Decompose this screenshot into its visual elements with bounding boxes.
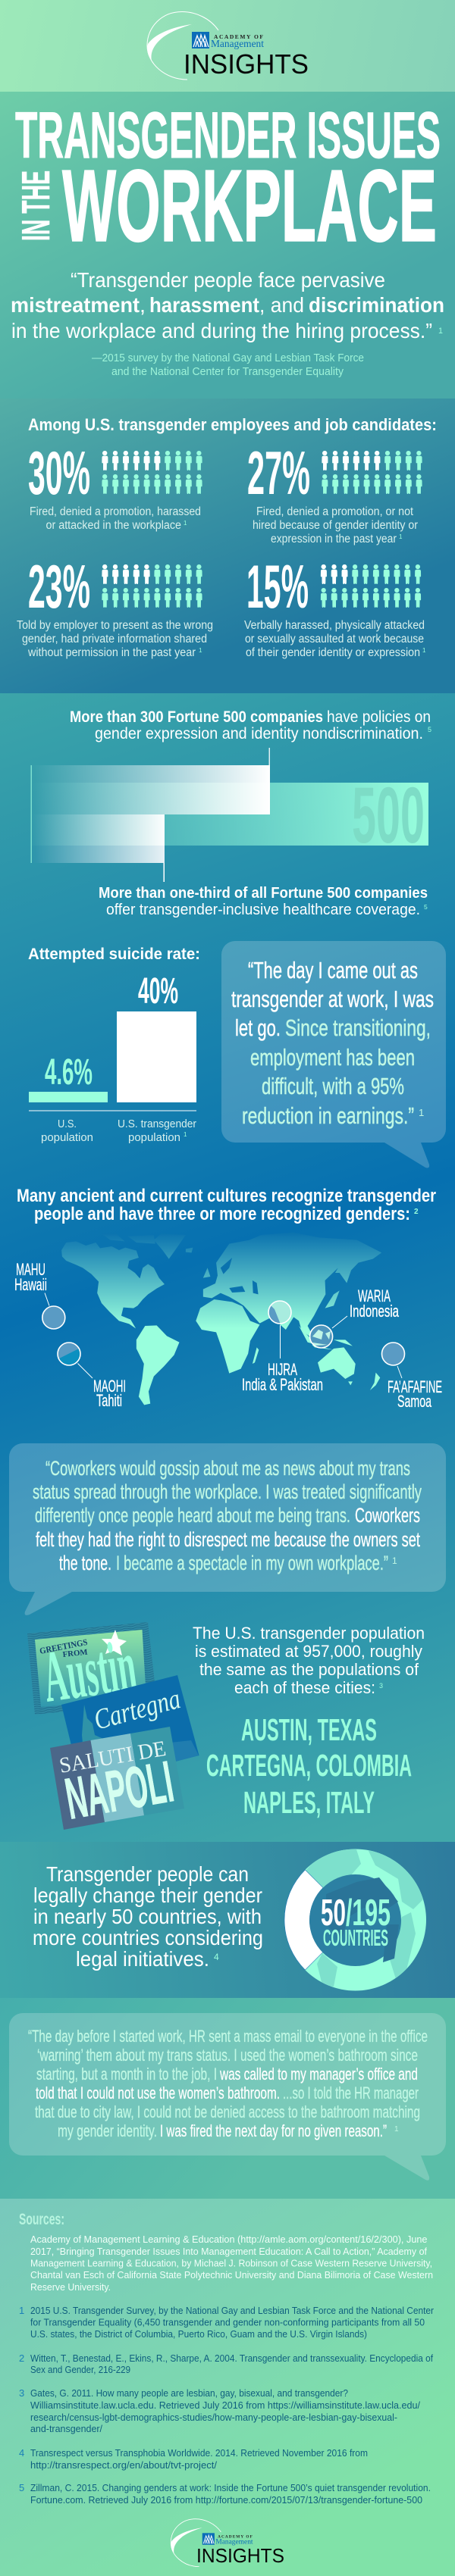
text: legal gender change: legally change their gender [33,1884,262,1907]
map marker: Fa'afafine, Samoa: Samoa [397,1392,431,1411]
source 3: Gates, G. 2011. How many people are lesbian, gay, bisexual, and transgender? [30,2387,348,2399]
source 2 [19,2352,433,2375]
callout: speech bubble quote 3: my gender identity. [58,2121,157,2140]
source 4: http://transrespect.org/en/about/tvt-project/ [30,2459,217,2471]
text: fortune 500 policies: 5 [428,726,431,733]
caption: Fired, denied a promotion, harassed [30,505,201,518]
donut chart: 50 of 195 countries: 50 [321,1893,346,1934]
title [14,99,441,263]
panel: sources [0,2199,455,2576]
bar: U.S. population [29,1052,108,1102]
caption: of their gender identity or expression [246,646,420,659]
postcard: Napoli: NAPOLI [61,1749,178,1832]
source 1: for Transgender Equality (6,450 transgender and gender non-conforming participants from all 50 [30,2317,425,2327]
source 1: 1 [19,2305,24,2316]
axis labels: U.S. transgender [118,1118,196,1130]
text: fortune 500 policies: have policies on [327,708,431,726]
source 3: 3 [19,2387,24,2399]
postcard: Austin [27,1622,157,1718]
source 3: Williamsinstitute.law.ucla.edu. Retrieved July 2016 from https://williamsinstitute.law.ucla.edu/ [30,2399,420,2411]
text: population comparison: the same as the populations of [199,1660,419,1679]
source 4: Transrespect versus Transphobia Worldwide. 2014. Retrieved November 2016 from [30,2447,368,2459]
callout: speech bubble quote 1: let go. [235,1014,281,1041]
bar: 300 companies [31,765,270,814]
callout: speech bubble quote 1 [221,941,446,1168]
intro quote: harassment [149,293,259,317]
heading: cultures [17,1186,436,1224]
postcard: Cartegna: Cartegna [90,1683,184,1737]
callout: speech bubble quote 3: told that I could not use the women’s bathroom. [36,2084,280,2102]
donut chart: 50 of 195 countries: /195 [346,1893,391,1934]
source 5: 5 [19,2482,24,2493]
callout: speech bubble quote 3 [9,2013,446,2181]
title: IN THE [14,170,58,241]
text: population comparison: The U.S. transgender population [193,1624,425,1643]
callout: speech bubble quote 2 [9,1443,446,1615]
callout: speech bubble quote 2: Coworkers [355,1504,420,1527]
intro quote: discrimination [309,293,444,317]
chart: attempted suicide rate: Attempted suicide rate: [28,946,200,963]
map marker: Fa'afafine, Samoa [382,1343,442,1411]
source 1 [19,2305,435,2340]
bar: one-third of companies [31,814,165,863]
stat: 15 percent [244,553,426,659]
axis labels: U.S. [58,1118,77,1130]
pictogram: 6 of 20 people [322,451,422,494]
axis labels: population [128,1131,180,1144]
logo: footer [171,2519,284,2567]
postcard: Cartegna [61,1675,199,1786]
stat: 23 percent [17,553,213,659]
panel: legal gender change [0,1842,455,1998]
map marker: Maohi, Tahiti: MAOHI [93,1377,126,1396]
source 3 [19,2387,420,2434]
postcard: Napoli [50,1727,184,1832]
callout: speech bubble quote 2: 1 [392,1555,397,1566]
source: AMLE article: Reserve University. [30,2281,111,2293]
donut chart: 50 of 195 countries [284,1849,428,1991]
map marker: Waria, Indonesia: WARIA [358,1286,391,1305]
bar: U.S. transgender population: 40% [138,971,178,1011]
axis labels: population [41,1131,93,1144]
map marker: Maohi, Tahiti: Tahiti [96,1391,122,1410]
callout: speech bubble quote 3: starting, but a month in to the job, I [36,2065,217,2084]
caption: Told by employer to present as the wrong [17,619,213,632]
source: AMLE article: 2017, “Bringing Transgender Issues Into Management Education: A Call to Action,” Academy of [30,2246,427,2257]
text: population comparison: is estimated at 957,000, roughly [195,1642,422,1661]
logo: Academy of Management Insights [147,12,309,80]
intro quote: , [140,293,146,317]
caption [253,505,418,546]
text: legal gender change [33,1862,263,1971]
logo: footer: INSIGHTS [196,2546,284,2567]
text: healthcare coverage: 5 [424,903,428,911]
source 2: 2 [19,2352,24,2364]
source 5: Zillman, C. 2015. Changing genders at work: Inside the Fortune 500’s quiet transgender revolution. [30,2482,431,2493]
axis labels: 1 [184,1131,187,1138]
callout: speech bubble quote 3: 1 [394,2125,399,2134]
source 3: research/census-lgbt-demographics-studies/how-many-people-are-lesbian-gay-bisexual- [30,2412,397,2423]
text: healthcare coverage: More than one-third of all Fortune 500 companies [99,885,428,902]
panel: fortune 500, suicide rate, cultures, cities [0,693,455,1842]
pictogram: 3 of 20 people [321,564,421,608]
intro quote: , and [259,293,304,317]
pictogram: 6 of 20 people [102,451,202,494]
panel: title and intro quote [0,92,455,399]
text: fortune 500 policies: More than 300 Fortune 500 companies [70,708,323,726]
intro quote: mistreatment [11,293,140,317]
postcard: Napoli: SALUTI DE [58,1737,168,1778]
intro quote: in the workplace and during the hiring process.” [11,319,432,342]
map marker: Mahu, Hawaii: MAHU [16,1260,46,1279]
logo: footer: ACADEMY OF [218,2535,253,2540]
source 3: and-transgender/ [30,2423,102,2434]
quote attribution: —2015 survey by the National Gay and Lesbian Task Force [92,352,364,364]
text: legal gender change: legal initiatives. [76,1947,209,1971]
caption: 1 [199,647,202,654]
heading: sources: Sources: [19,2211,64,2228]
source 4: 4 [19,2447,24,2459]
stat: 27 percent: 27% [247,439,310,508]
caption: hired because of gender identity or [253,519,418,532]
stat: 15 percent: 15% [246,553,309,621]
text: legal gender change: in nearly 50 countries, with [33,1905,262,1928]
bar: 500 companies [31,783,428,846]
source 2: Sex and Gender, 216-229 [30,2364,130,2375]
callout: speech bubble quote 2: the tone. [59,1552,111,1574]
map marker: Mahu, Hawaii: Hawaii [14,1275,47,1294]
pictogram: 5 of 20 people [102,564,202,608]
source 5 [19,2482,431,2506]
postcards [27,1622,199,1832]
text: healthcare coverage: offer transgender-inclusive healthcare coverage. [106,901,420,918]
bar: U.S. population: 4.6% [45,1052,93,1093]
text: population comparison: each of these cities: [234,1678,375,1697]
chart: fortune 500 bars [30,748,428,882]
logo: Academy of Management Insights: ACADEMY OF [214,33,263,40]
intro quote: “Transgender people face pervasive [71,268,385,292]
stat: 27 percent [247,439,422,546]
map marker: Hijra, India and Pakistan: HIJRA [268,1360,297,1379]
caption: 1 [184,520,187,527]
source 5: Fortune.com. Retrieved July 2016 from http://fortune.com/2015/07/13/transgender-fortune-500 [30,2494,422,2506]
source 4 [19,2447,368,2471]
caption: Verbally harassed, physically attacked [244,619,425,632]
text: legal gender change: 4 [214,1952,219,1962]
chart: attempted suicide rate [28,946,200,1144]
heading: cultures: 2 [414,1208,419,1216]
quote attribution [92,352,364,378]
stat: 30 percent: 30% [28,439,90,508]
intro quote [11,268,444,342]
intro quote: 1 [438,327,443,336]
bar: U.S. transgender population [117,971,196,1102]
stat: 23 percent: 23% [28,553,90,621]
source: AMLE article: Management Learning & Education, by Michael J. Robinson of Case Western Reserve University, [30,2258,432,2268]
caption: or attacked in the workplace [46,519,181,532]
source: AMLE article [30,2234,433,2293]
map marker: Hijra, India and Pakistan [242,1301,323,1394]
postcard: Austin: GREETINGS [39,1638,88,1656]
world map [57,1233,381,1405]
panel: bathroom quote [0,1998,455,2199]
map marker: Waria, Indonesia [310,1286,400,1348]
logo: Academy of Management Insights: INSIGHTS [184,48,309,80]
quote attribution: and the National Center for Transgender Equality [111,366,344,378]
source 1: U.S. states, the District of Columbia, Puerto Rico, Guam and the U.S. Virgin Islands) [30,2328,367,2340]
stat: 30 percent [28,439,202,532]
source: AMLE article: Academy of Management Learning & Education (http://amle.aom.org/content/16/2/300), June [30,2234,428,2245]
text: fortune 500 policies: gender expression and identity nondiscrimination. [95,724,423,742]
icon: star [102,1630,127,1655]
caption [244,619,426,659]
caption: Fired, denied a promotion, or not [256,505,414,518]
panel: workplace statistics [0,399,455,693]
map marker: Maohi, Tahiti [58,1343,126,1410]
text: fortune 500 policies [70,708,431,742]
caption: 1 [422,647,426,654]
caption: 1 [399,533,403,540]
panel: header band [0,0,455,92]
logo: Academy of Management Insights: Management [211,39,264,50]
map marker: Hijra, India and Pakistan: India & Pakistan [242,1375,323,1394]
map marker: Mahu, Hawaii [14,1260,65,1329]
text: population comparison: 3 [379,1682,383,1690]
caption [30,505,201,532]
caption: gender, had private information shared [22,633,207,646]
caption [17,619,213,659]
postcard: Austin: FROM [62,1649,88,1659]
text: legal gender change: more countries considering [33,1926,263,1949]
caption: expression in the past year [271,533,397,546]
caption: or sexually assaulted at work because [245,633,424,646]
caption: without permission in the past year [27,646,196,659]
postcard: Austin: Austin [38,1624,141,1718]
map marker: Waria, Indonesia: Indonesia [350,1302,400,1321]
axis labels [41,1118,196,1144]
callout: speech bubble quote 1: 1 [419,1107,424,1118]
logo: footer: Management [215,2537,253,2546]
text: legal gender change: Transgender people can [46,1862,249,1886]
text: population comparison [193,1624,425,1697]
city list [206,1712,412,1820]
text: healthcare coverage [99,885,428,918]
source: AMLE article: Chantal van Esch of California State Polytechnic University and Diana Bilimoria of Case Western [30,2269,433,2281]
